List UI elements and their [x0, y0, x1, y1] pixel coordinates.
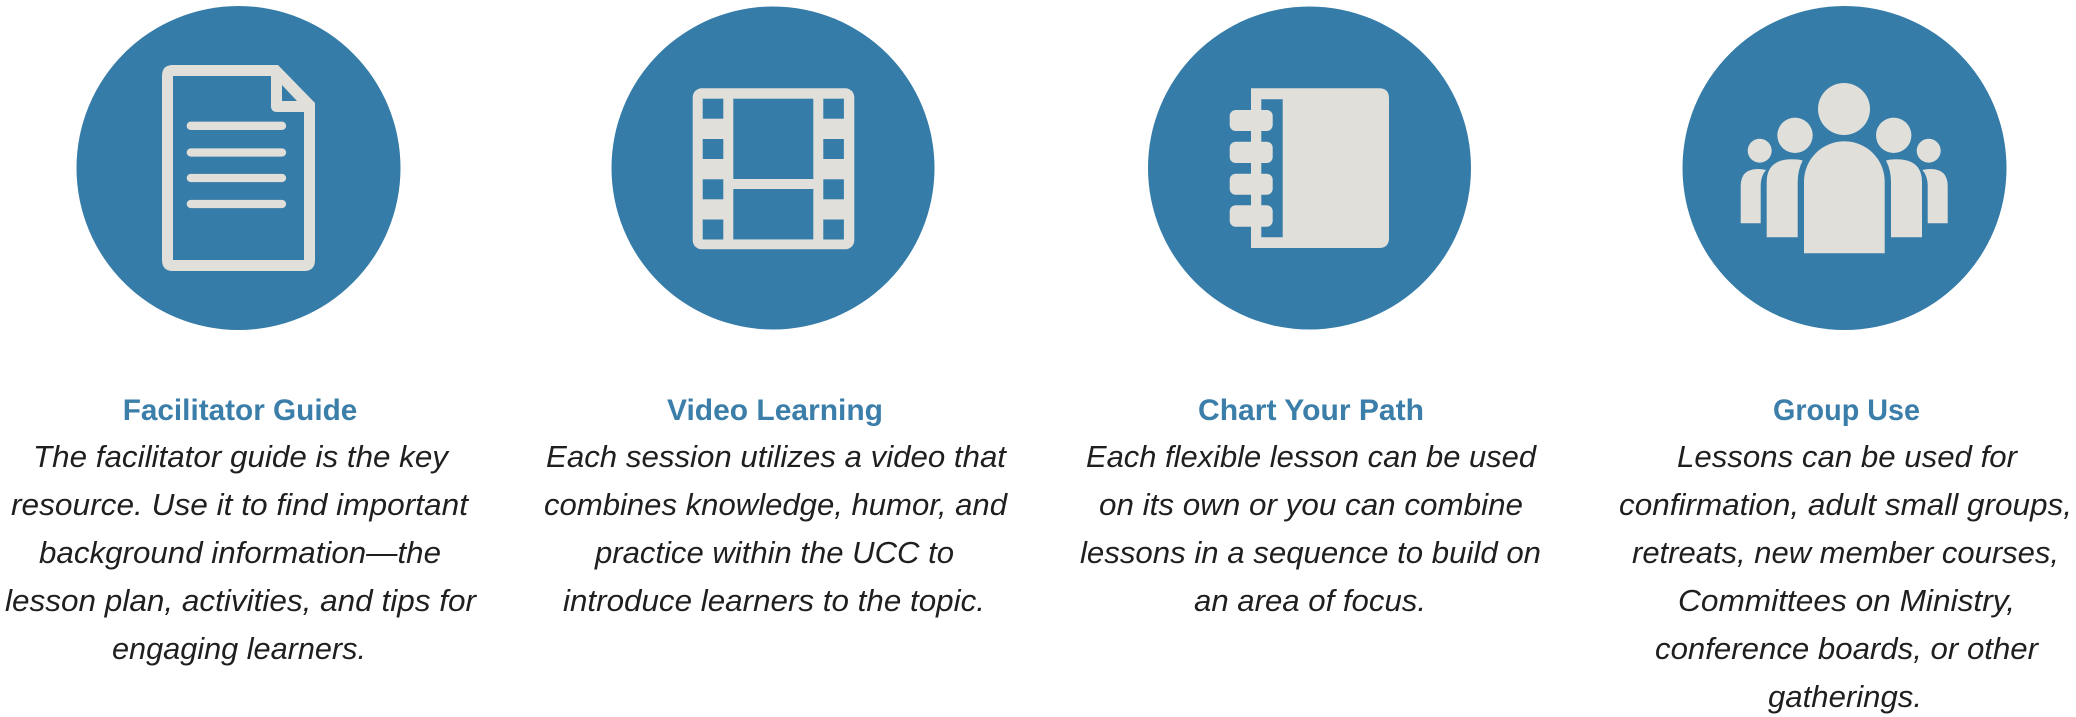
text block: video learning description: practice within the UCC to [594, 535, 954, 570]
text block: chart your path description: Each flexible lesson can be used [1086, 439, 1538, 474]
icon: spiral notebook in blue circle [1148, 6, 1471, 330]
text block: group use description: gatherings. [1768, 679, 1922, 714]
text block: chart your path description [1080, 439, 1541, 618]
icon: document in blue circle [76, 6, 400, 330]
panel: group use [1619, 6, 2072, 714]
text block: group use description [1619, 439, 2072, 714]
text block: group use description: confirmation, adult small groups, [1619, 487, 2072, 522]
text block: facilitator guide description: background information—the [39, 535, 441, 570]
panel: chart your path [1080, 6, 1541, 618]
heading: Group Use: Group Use [1773, 394, 1920, 427]
text block: facilitator guide description: engaging learners. [112, 631, 366, 666]
heading: Chart Your Path: Chart Your Path [1198, 394, 1424, 427]
text block: video learning description [544, 439, 1009, 618]
text block: group use description: retreats, new member courses, [1632, 535, 2059, 570]
text block: chart your path description: on its own or you can combine [1099, 487, 1523, 522]
text block: video learning description: combines knowledge, humor, and [544, 487, 1009, 522]
text block: facilitator guide description: lesson plan, activities, and tips for [5, 583, 478, 618]
text block: facilitator guide description: resource. Use it to find important [11, 487, 469, 522]
text block: chart your path description: lessons in a sequence to build on [1080, 535, 1541, 570]
heading: Facilitator Guide: Facilitator Guide [123, 394, 357, 427]
text block: group use description: conference boards, or other [1655, 631, 2040, 666]
text block: group use description: Committees on Ministry, [1678, 583, 2015, 618]
text block: chart your path description: an area of focus. [1194, 583, 1426, 618]
icon: group of people in blue circle [1682, 6, 2006, 330]
heading: Video Learning: Video Learning [667, 394, 883, 427]
text block: video learning description: introduce learners to the topic. [563, 583, 985, 618]
panel: video learning [544, 6, 1009, 618]
text block: facilitator guide description: The facilitator guide is the key [33, 439, 451, 474]
text block: video learning description: Each session utilizes a video that [546, 439, 1007, 474]
text block: group use description: Lessons can be used for [1677, 439, 2019, 474]
text block: facilitator guide description [5, 439, 478, 666]
panel: facilitator guide [5, 6, 478, 666]
icon: film strip in blue circle [612, 6, 934, 330]
